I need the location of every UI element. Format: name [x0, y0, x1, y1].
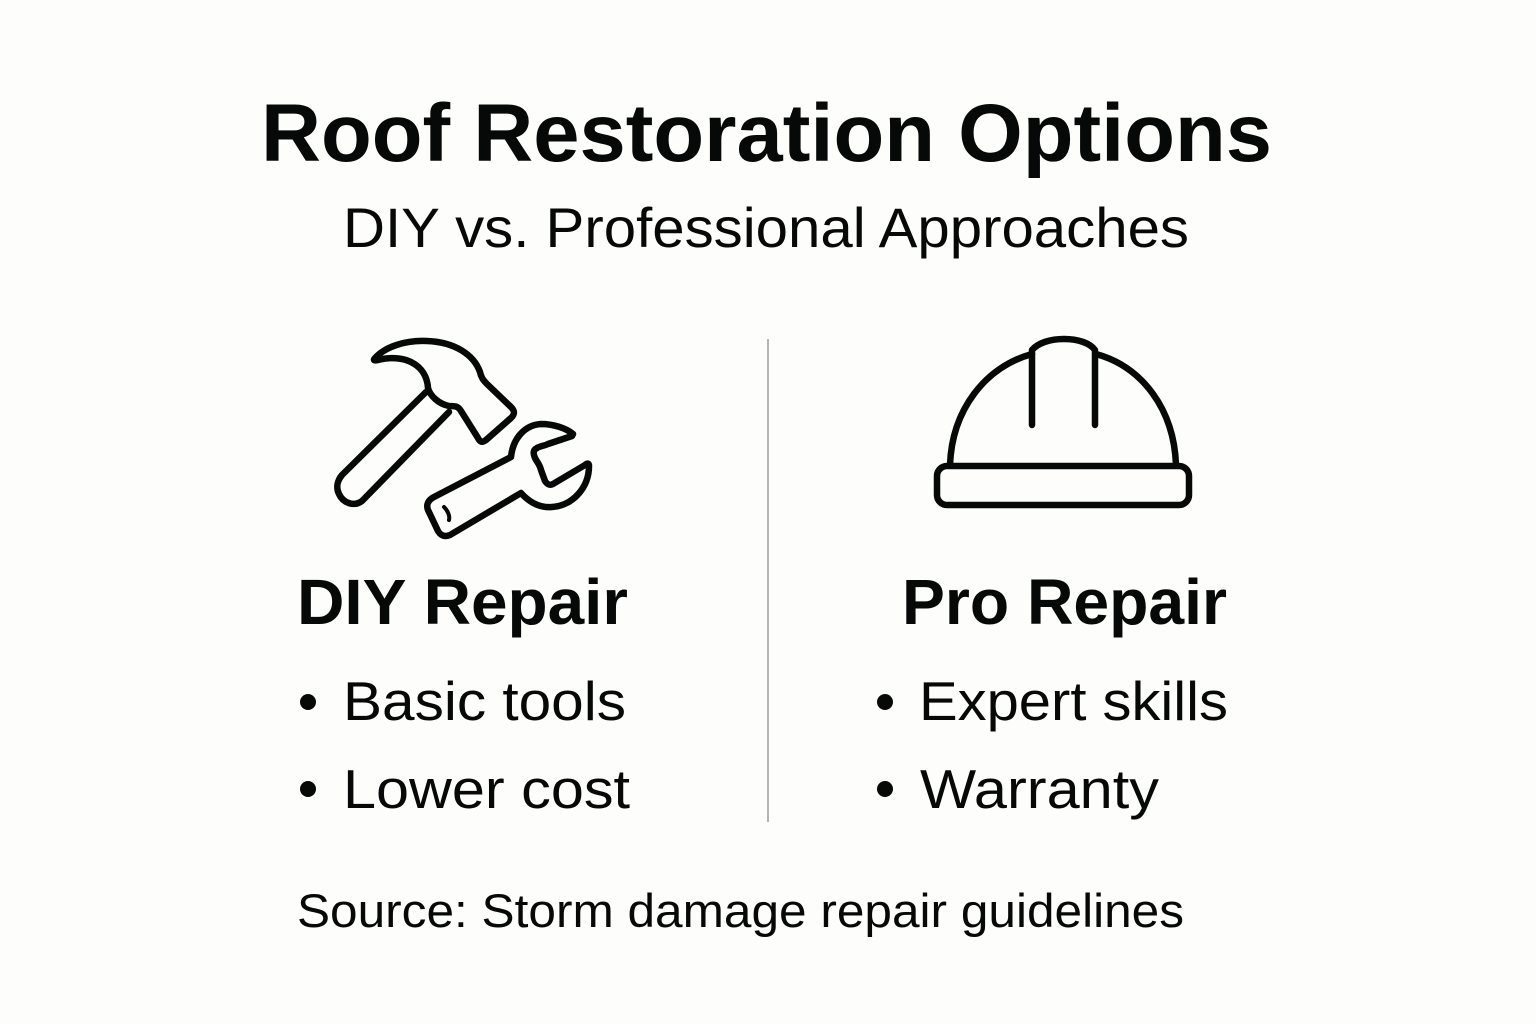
heading: DIY Repair: DIY Repair [297, 566, 628, 638]
wrench [427, 424, 589, 536]
icon: hammer and wrench [337, 341, 589, 536]
brim [937, 466, 1189, 505]
bullet [877, 694, 893, 710]
subtitle: DIY vs. Professional Approaches [343, 196, 1189, 259]
item: Basic tools: Basic tools [343, 670, 626, 732]
hammer head [374, 341, 514, 442]
list: Pro [877, 670, 1228, 820]
dome [950, 354, 1032, 465]
title: Roof Restoration Options [261, 88, 1272, 179]
bullet [300, 781, 316, 797]
item: Expert skills: Expert skills [919, 670, 1228, 732]
heading: Pro Repair: Pro Repair [902, 566, 1227, 638]
divider [767, 339, 769, 822]
bullet [877, 781, 893, 797]
source note: Source: Storm damage repair guidelines [297, 884, 1184, 937]
list: DIY [300, 670, 630, 820]
hammer handle [337, 392, 449, 504]
item: Lower cost: Lower cost [343, 758, 630, 820]
bullet [300, 694, 316, 710]
crest [1032, 339, 1095, 425]
wrench detail [444, 507, 449, 520]
item: Warranty: Warranty [920, 758, 1160, 820]
icon: hard hat [937, 339, 1189, 505]
